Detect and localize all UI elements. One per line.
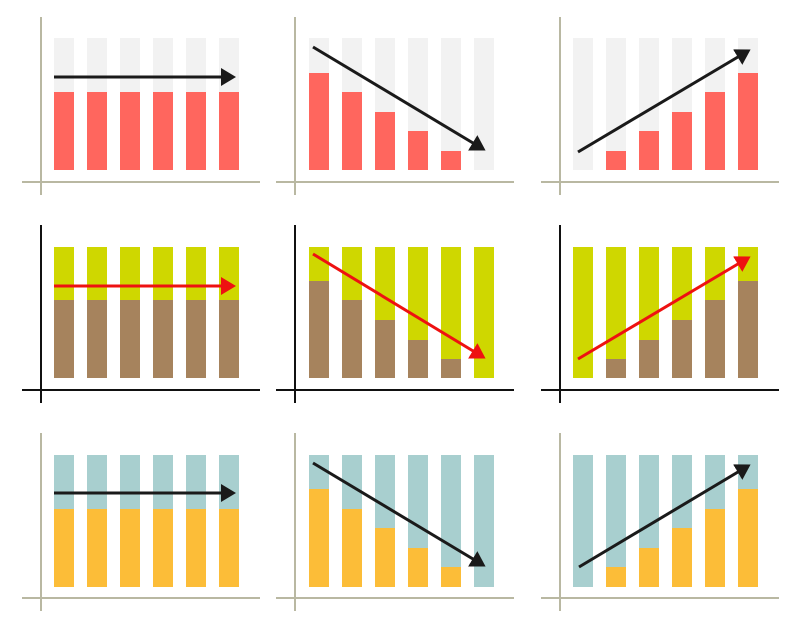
arrow: up [579,466,748,567]
arrow: down red [313,254,483,357]
chart: row2 increasing brown [541,225,779,403]
arrow: up red [578,258,748,359]
arrow: flat [54,76,233,78]
chart: row1 flat red [22,17,260,195]
arrow: up [578,51,748,152]
chart: row1 decreasing red [276,17,514,195]
chart: row3 flat orange [22,433,260,611]
arrow: flat red [54,284,233,288]
arrow: flat [54,492,233,494]
chart: row2 decreasing brown [276,225,514,403]
chart: row3 increasing orange [541,433,779,611]
arrow: down [313,463,483,565]
arrow: down [313,47,483,149]
chart: row2 flat brown [22,225,260,403]
chart: row1 increasing red [541,17,779,195]
chart: row3 decreasing orange [276,433,514,611]
